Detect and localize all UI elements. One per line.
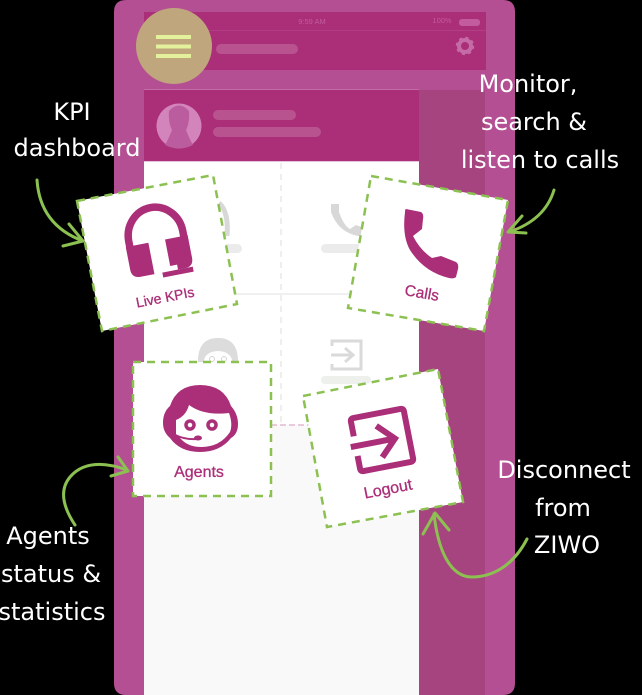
label: Calls: Calls [403, 282, 440, 305]
caption: monitor calls: search & [481, 108, 587, 136]
card: Logout [303, 369, 463, 527]
caption: KPI dashboard [14, 98, 140, 162]
caption: agents status: Agents [6, 522, 90, 550]
arrow: to Calls [508, 190, 554, 233]
caption: KPI dashboard: KPI [53, 98, 91, 126]
caption: KPI dashboard: dashboard [14, 134, 140, 162]
icon: agent face [163, 385, 238, 452]
caption: disconnect: from [535, 494, 591, 522]
caption: agents status [0, 522, 105, 626]
arrow: to Logout [423, 513, 527, 577]
icon: phone [404, 209, 458, 278]
ghost icon: phone [331, 204, 364, 236]
phone body [114, 0, 515, 695]
app top bar: 9:59 AM [298, 17, 326, 26]
caption: monitor calls [461, 70, 619, 174]
ghost icon: logout [331, 341, 361, 369]
label: Live KPIs: Live KPIs [134, 284, 196, 311]
avatar [156, 104, 202, 148]
drawer profile header [144, 89, 419, 162]
icon: settings gear [457, 38, 473, 54]
card: Calls [348, 176, 508, 331]
app top bar: 100% [432, 16, 452, 25]
icon: logout arrow box [345, 408, 414, 473]
caption: monitor calls: listen to calls [461, 146, 619, 174]
arrow: to Live KPIs [37, 180, 83, 246]
caption: agents status: statistics [0, 598, 105, 626]
caption: agents status: status & [1, 560, 101, 588]
ghost icon: agent [198, 338, 238, 364]
drawer shadow area [419, 90, 485, 695]
card: Live KPIs [77, 175, 237, 331]
caption: disconnect [497, 456, 631, 559]
app top bar [144, 12, 486, 70]
arrow: to Agents [64, 457, 128, 525]
label: Logout: Logout [363, 476, 414, 503]
drawer panel [144, 162, 419, 695]
menu button highlight [136, 8, 212, 84]
card: Agents [133, 362, 271, 496]
caption: monitor calls: Monitor, [479, 70, 577, 98]
caption: disconnect: Disconnect [497, 456, 631, 484]
icon: headset [119, 202, 195, 283]
label: Agents: Agents [174, 464, 224, 481]
ghost icon: headset [219, 203, 227, 236]
caption: disconnect: ZIWO [534, 531, 600, 559]
